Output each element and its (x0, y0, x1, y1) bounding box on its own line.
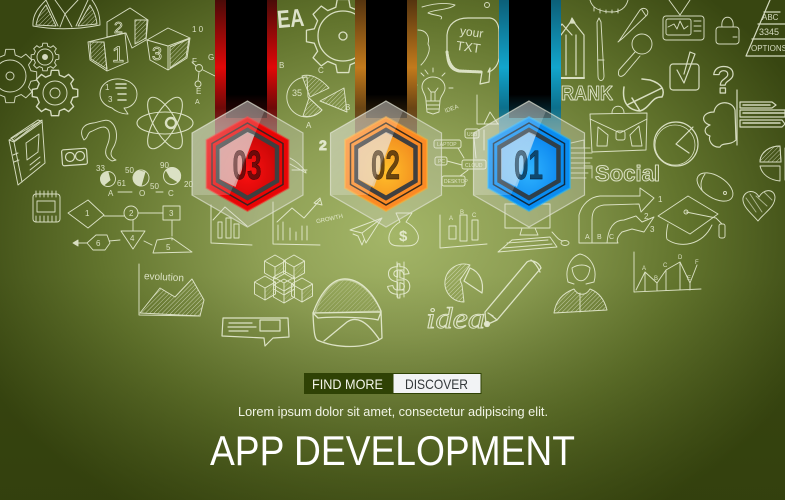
button: discover (393, 374, 481, 394)
icon: network nodes: F (192, 57, 197, 66)
icon: goggles box (61, 148, 88, 166)
subtitle: Lorem ipsum dolor sit amet, consectetur adipiscing elit. (238, 404, 548, 419)
word: RANK: RANK (561, 83, 613, 105)
icon: branching arrows: B (597, 234, 602, 241)
network diagram: USB (467, 132, 478, 138)
icon: bar chart (211, 205, 252, 245)
icon: money bag: $ (399, 228, 408, 245)
hexagon badge (330, 101, 442, 227)
icon: swirl (422, 2, 490, 19)
icon: folded lines (290, 158, 307, 173)
icon: column chart (440, 210, 487, 248)
icon: magnifier (618, 34, 652, 76)
icon: branching arrows: 2 (644, 212, 649, 221)
icon: chat box (222, 318, 289, 346)
icon: branching arrows: 1 (658, 195, 663, 204)
icon: small pie charts: 90 (160, 161, 169, 170)
icon: paper plane (350, 218, 382, 245)
button pair (304, 373, 481, 394)
flow chart: 1 (85, 209, 90, 218)
icon: graduation cap (658, 196, 725, 244)
icon: small pie charts: 61 (117, 179, 126, 188)
icon: speech bubble with numbers (100, 79, 137, 114)
icon: big pencil (553, 18, 584, 78)
icon: small pie charts: O (139, 189, 145, 198)
icon: small pie charts: A (108, 189, 114, 198)
icon: curved scribble (418, 30, 429, 74)
flow chart (68, 200, 192, 253)
icon: speech bubble your text: TXT (455, 38, 482, 56)
icon: dollar: $ (387, 257, 410, 304)
icon: atom (137, 92, 193, 154)
icon: light bulb: IDEA (444, 104, 459, 115)
icon: businessman (33, 0, 100, 29)
icon: question mark: ? (712, 60, 735, 102)
icon: glasses (624, 79, 663, 111)
icon: top gear (306, 0, 380, 73)
button: find more (304, 373, 393, 394)
icon: pyramid (746, 0, 785, 56)
icon: envelope (313, 279, 382, 346)
hexagon badge: 02 (371, 142, 400, 188)
icon: number cubes: 2 (114, 20, 123, 37)
icon: speech bubble your text (447, 18, 499, 84)
icon: pyramid: ABC (762, 13, 779, 22)
icon: microchip (33, 191, 60, 222)
hexagon badge (474, 101, 584, 227)
icon: gears (0, 43, 78, 116)
title: APP DEVELOPMENT (210, 427, 575, 474)
icon: branching arrows (579, 188, 663, 243)
icon: small pie charts: 50 (150, 182, 159, 191)
icon: coin stack top (590, 0, 628, 13)
icon: cloud with signpost (704, 90, 785, 147)
icon: briefcase (590, 106, 647, 152)
icon: growth chart: GROWTH (316, 214, 344, 225)
icon: computer (498, 204, 569, 252)
icon: pencil diagonal (618, 8, 648, 42)
icon: network nodes: A (195, 99, 200, 106)
icon: branching arrows: 3 (650, 225, 655, 234)
flow chart: 6 (96, 239, 101, 248)
icon: number cubes (88, 8, 190, 71)
icon: clock (654, 122, 698, 166)
icon: branching arrows: C (609, 234, 614, 241)
icon: padlock (716, 17, 739, 44)
icon: book (9, 120, 45, 185)
medal 03 red (192, 0, 303, 227)
icon: column chart: B (460, 210, 464, 216)
icon: pie chart 35: B (279, 61, 284, 70)
icon: speech bubble your text: your (459, 24, 484, 41)
icon: speech bubble with numbers: 3 (108, 95, 113, 104)
icon: pie chart 35: C (318, 66, 324, 75)
flow chart: 2 (129, 209, 134, 218)
icon: pie chart 35: 2 (319, 137, 327, 153)
network diagram: DESKTOP (444, 179, 468, 185)
icon: pencil writing (484, 260, 541, 326)
icon: businesswoman (554, 254, 607, 313)
icon: pie chart (445, 264, 482, 302)
hexagon badge: 03 (232, 142, 262, 188)
icon: network nodes (192, 25, 215, 106)
icon: evolution chart: evolution (144, 271, 184, 284)
icon: small pie charts: 33 (96, 164, 105, 173)
icon: chart with peaks: A (642, 266, 646, 272)
icon: pie chart 35 (279, 61, 350, 153)
icon: network nodes: 1 0 (192, 25, 204, 34)
chalk doodles (0, 0, 785, 346)
icon: speech bubble with numbers: 1 (105, 83, 110, 92)
icon: column chart: A (449, 216, 453, 222)
hexagon badge: 01 (514, 142, 543, 188)
icon: growth chart (273, 198, 344, 245)
network diagram: PC (438, 159, 445, 165)
icon: branching arrows: A (585, 234, 590, 241)
flow chart: 5 (166, 243, 171, 252)
icon: small pie charts: 50 (125, 166, 134, 175)
icon: small pie charts: 20 (184, 180, 193, 189)
icon: small pie charts: C (168, 189, 174, 198)
icon: chart with peaks: D (678, 255, 683, 261)
medal 02 orange (330, 0, 442, 227)
flow chart: 4 (130, 234, 135, 243)
icon: network nodes: E (196, 87, 201, 96)
icon: number cubes: 1 (112, 42, 124, 67)
medal 01 blue (474, 0, 584, 227)
icon: network nodes: G (208, 53, 214, 62)
icon: isometric cubes (254, 255, 312, 303)
ribbon (355, 0, 417, 135)
icon: evolution chart (139, 264, 204, 316)
icon: pyramid: 3345 (759, 27, 779, 37)
icon: pen (597, 18, 604, 80)
icon: monitor (663, 0, 704, 40)
icon: computer mouse (692, 167, 738, 207)
icon: pie chart 35: B (345, 103, 350, 112)
icon: money bag (389, 213, 418, 246)
icon: chart with peaks: B (654, 276, 658, 282)
icon: chart with peaks: E (687, 276, 691, 282)
icon: triangle chart (477, 95, 500, 124)
icon: checkbox (670, 52, 699, 90)
icon: light bulb (413, 68, 459, 115)
network diagram (434, 129, 486, 186)
word: idea: idea (426, 302, 485, 335)
icon: document stack (571, 140, 592, 178)
flow chart: 3 (169, 209, 174, 218)
icon: chart with peaks (634, 252, 701, 292)
button: find more: FIND MORE (312, 376, 383, 392)
network diagram: CLOUD (465, 163, 483, 169)
icon: small pie charts (96, 161, 193, 198)
hexagon badge (192, 101, 303, 227)
ribbon (215, 0, 277, 135)
icon: curly shape (82, 120, 117, 161)
ribbon (499, 0, 561, 135)
icon: heart (743, 191, 775, 221)
icon: column chart: C (472, 213, 477, 219)
network diagram: LAPTOP (437, 142, 457, 148)
button: discover: DISCOVER (405, 376, 468, 392)
icon: chart with peaks: C (663, 263, 668, 269)
icon: chart with peaks: F (695, 260, 699, 266)
icon: pie chart 35: 35 (292, 88, 302, 98)
icon: pie chart 35: A (306, 121, 312, 130)
word: Social: Social (595, 161, 660, 186)
icon: number cubes: 3 (152, 44, 162, 64)
icon: pie slice right (760, 146, 785, 181)
icon: big letters EA: EA (276, 4, 305, 34)
